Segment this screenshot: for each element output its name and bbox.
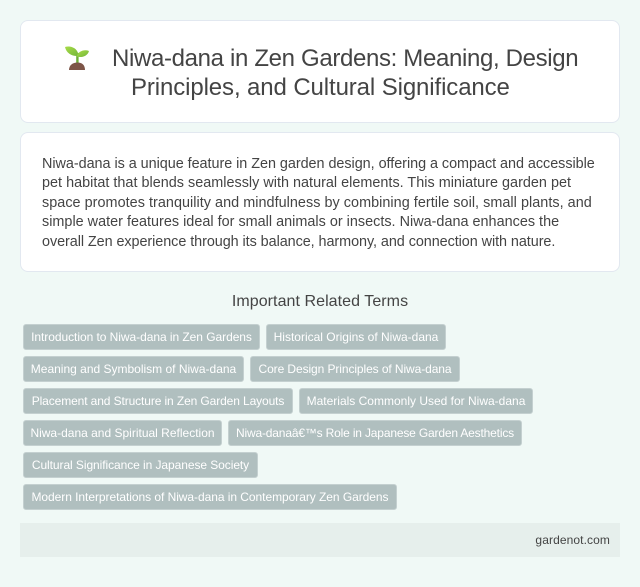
tag: Core Design Principles of Niwa-dana	[259, 362, 451, 376]
tag: Cultural Significance in Japanese Society	[32, 458, 249, 472]
tag: Introduction to Niwa-dana in Zen Gardens	[31, 330, 252, 344]
description text: simple water features ideal for small animals or insects. Niwa-dana enhances the	[42, 214, 559, 230]
tag	[266, 324, 446, 350]
tag	[23, 356, 244, 382]
tag	[23, 388, 293, 414]
description text: space promotes tranquility and mindfulness by combining fertile soil, small plants, and	[42, 195, 592, 211]
icon: seedling	[65, 46, 89, 70]
panel: header card	[20, 20, 620, 123]
tag	[299, 388, 533, 414]
tag: Niwa-dana and Spiritual Reflection	[30, 426, 215, 440]
description text: Niwa-dana is a unique feature in Zen garden design, offering a compact and accessible	[42, 156, 595, 172]
section heading: Important Related Terms	[232, 293, 408, 310]
tag: Modern Interpretations of Niwa-dana in Contemporary Zen Gardens	[31, 490, 389, 504]
tag: Niwa-danaâ€™s Role in Japanese Garden Aesthetics	[236, 426, 514, 440]
footer source text: gardenot.com	[535, 533, 610, 547]
tag	[23, 484, 397, 510]
tag: Materials Commonly Used for Niwa-dana	[307, 394, 525, 408]
footer bar	[20, 523, 620, 557]
title: Niwa-dana in Zen Gardens: Meaning, Design	[112, 45, 578, 72]
description text: overall Zen experience through its balance, harmony, and connection with nature.	[42, 234, 555, 250]
panel: description card	[20, 132, 620, 272]
tag: Placement and Structure in Zen Garden Layouts	[32, 394, 284, 408]
description text: pet habitat that blends seamlessly with natural elements. This miniature garden pet	[42, 175, 571, 191]
tag: Meaning and Symbolism of Niwa-dana	[31, 362, 236, 376]
description text	[42, 156, 595, 250]
tag	[23, 452, 258, 478]
tag	[23, 420, 222, 446]
tag	[23, 324, 260, 350]
title: Principles, and Cultural Significance	[131, 74, 510, 101]
related terms tag list	[23, 324, 533, 510]
tag	[250, 356, 460, 382]
title	[112, 45, 578, 101]
tag: Historical Origins of Niwa-dana	[274, 330, 438, 344]
tag	[228, 420, 522, 446]
